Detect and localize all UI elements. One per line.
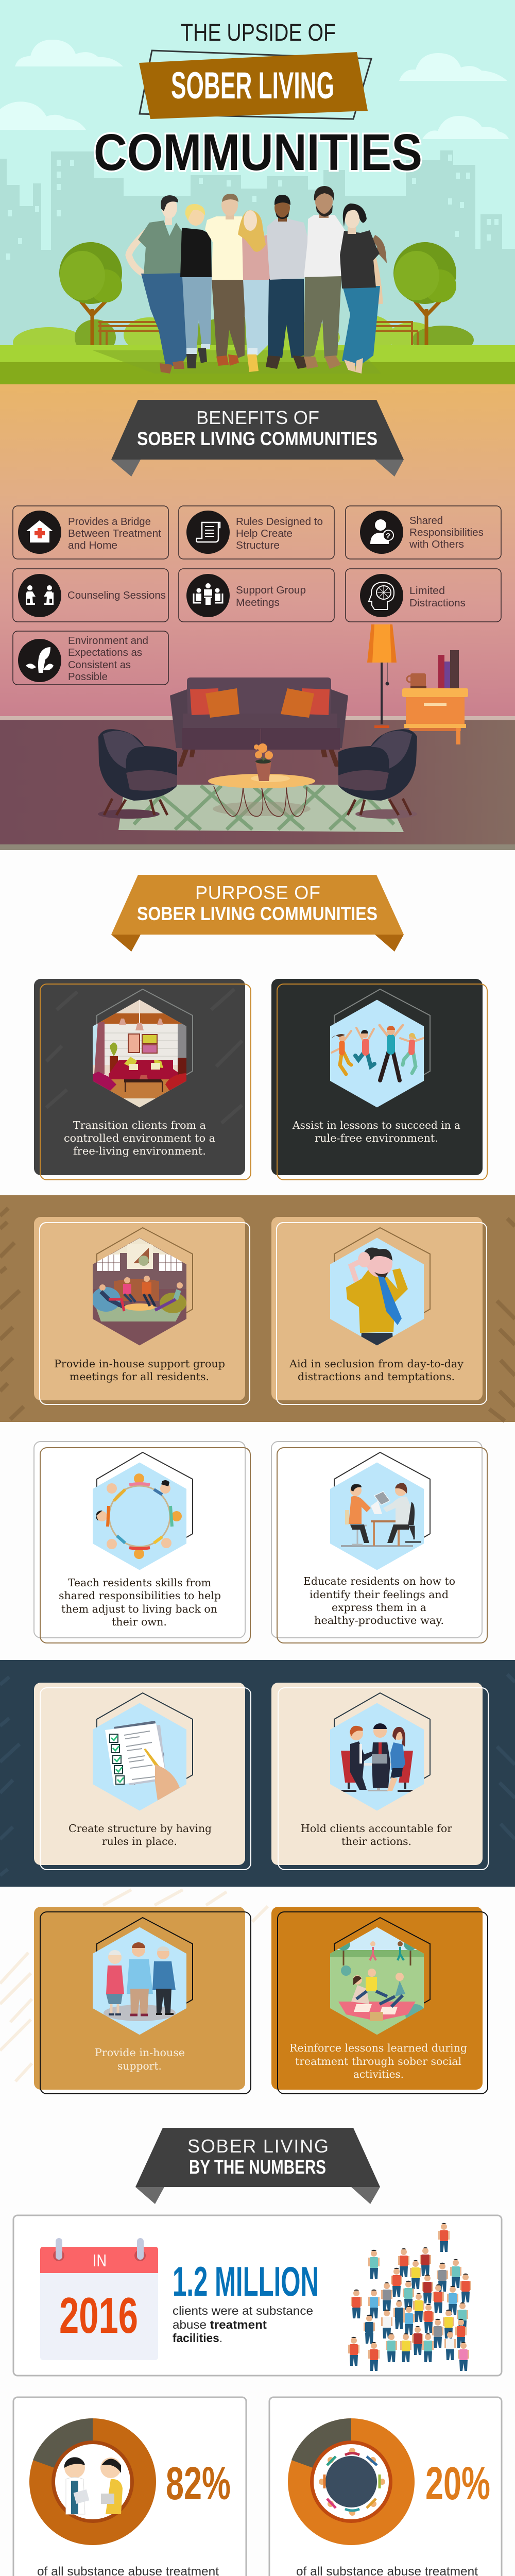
benefit 3 xyxy=(346,506,501,559)
stat: 1.2 MILLION xyxy=(173,2259,319,2305)
benefit 2: Structure xyxy=(236,539,280,551)
text: them adjust to living back on xyxy=(61,1603,217,1615)
text xyxy=(59,1577,221,1628)
text: healthy-productive way. xyxy=(314,1614,444,1626)
icon: calendar: IN xyxy=(93,2251,107,2270)
text: Hold clients accountable for xyxy=(301,1822,452,1835)
benefit 1: Provides a Bridge xyxy=(68,516,151,528)
benefit 7 xyxy=(13,631,168,685)
person 5 grey sweater xyxy=(266,195,309,369)
illustration: stressed man xyxy=(330,1238,424,1346)
text: Provide in-house support group xyxy=(54,1358,225,1370)
illustration: meeting at table xyxy=(330,1703,424,1811)
person 2 black top xyxy=(180,204,212,368)
card: hold accountable xyxy=(271,1683,488,1870)
benefit 5: Meetings xyxy=(236,597,280,608)
clouds xyxy=(0,40,509,139)
person 3 cream shirt xyxy=(205,194,246,366)
donut chart xyxy=(29,2418,156,2545)
benefit 7: Expectations as xyxy=(68,647,142,658)
benefit 2: Help Create xyxy=(236,528,293,539)
card: create structure xyxy=(34,1683,251,1870)
benefit 3: Shared xyxy=(409,515,443,527)
sofa xyxy=(170,677,348,767)
illustration: living room xyxy=(93,999,186,1109)
text xyxy=(95,2046,185,2072)
heading banner: by the numbers: SOBER LIVING xyxy=(187,2136,329,2157)
ground xyxy=(0,345,515,386)
text: identify their feelings and xyxy=(310,1588,449,1601)
text: their own. xyxy=(112,1616,167,1628)
benefit 1 xyxy=(13,506,168,559)
benefit 3: ? xyxy=(386,532,390,540)
text: treatment through sober social xyxy=(295,2055,461,2067)
caption: facilities. xyxy=(173,2331,222,2345)
panel: 1.2 million clients xyxy=(13,2215,502,2376)
text: Teach residents skills from xyxy=(68,1577,211,1589)
text xyxy=(54,1358,225,1383)
illustration: group room xyxy=(92,1238,186,1346)
text: Educate residents on how to xyxy=(303,1575,455,1587)
donut chart xyxy=(288,2418,415,2545)
text xyxy=(303,1575,455,1626)
text xyxy=(289,2042,467,2080)
illustration: circle of people xyxy=(93,1462,186,1570)
illustration: three people xyxy=(93,1927,186,2035)
card: assist in lessons xyxy=(271,979,487,1180)
card: aid in seclusion xyxy=(271,1217,487,1404)
person 6 white shirt xyxy=(304,186,346,369)
title line 1: THE UPSIDE OF xyxy=(181,19,336,46)
heading banner: benefits xyxy=(111,400,404,477)
person 1 green top xyxy=(129,195,187,374)
caption: clients were at substance xyxy=(173,2304,313,2317)
title banner xyxy=(139,50,371,119)
text: activities. xyxy=(353,2068,404,2080)
tree right xyxy=(393,242,456,345)
benches xyxy=(98,321,419,345)
panel: navy band xyxy=(0,1660,515,1887)
rug xyxy=(118,785,404,832)
illustration: two people at table xyxy=(330,1462,424,1570)
card: in-house support xyxy=(34,1907,251,2094)
heading banner: purpose xyxy=(111,875,404,952)
card: teach residents skills xyxy=(34,1442,250,1643)
benefit 6: Limited xyxy=(409,585,445,597)
heading banner: by the numbers: BY THE NUMBERS xyxy=(189,2157,326,2178)
heading banner: benefits: BENEFITS OF xyxy=(196,407,319,428)
percent: 82% xyxy=(166,2458,231,2510)
text: Provide in-house xyxy=(95,2046,185,2059)
text: express them in a xyxy=(332,1601,426,1614)
text: free-living environment. xyxy=(73,1145,206,1157)
caption: abuse treatment xyxy=(173,2318,267,2331)
person 4 pink top xyxy=(238,210,274,372)
text xyxy=(64,1119,215,1157)
text: shared responsibilities to help xyxy=(59,1589,221,1602)
benefit 4: Counseling Sessions xyxy=(67,589,166,601)
crowd of people xyxy=(348,2223,471,2371)
benefit 3: with Others xyxy=(409,538,464,550)
benefit 6 xyxy=(346,569,501,622)
benefit 2 xyxy=(179,506,334,559)
text: rules in place. xyxy=(102,1835,177,1848)
card: support group meetings xyxy=(34,1217,250,1404)
side table with books and cup xyxy=(402,650,468,744)
icon: calendar: 2016 xyxy=(59,2287,138,2344)
text: their actions. xyxy=(341,1835,411,1848)
illustration: jumping people xyxy=(330,999,424,1108)
benefit 3: Responsibilities xyxy=(409,527,484,538)
text: Transition clients from a xyxy=(73,1119,206,1131)
benefit 7: Consistent as xyxy=(68,659,131,671)
text xyxy=(289,1358,464,1383)
benefit 7: Environment and xyxy=(68,635,148,647)
coffee table and vase xyxy=(208,743,315,817)
benefit 5: Support Group xyxy=(236,584,306,596)
city skyline xyxy=(0,150,515,345)
benefit 2: Rules Designed to xyxy=(236,516,323,528)
text xyxy=(292,1119,460,1144)
text: Reinforce lessons learned during xyxy=(289,2042,467,2054)
text: meetings for all residents. xyxy=(70,1370,209,1383)
text: Aid in seclusion from day-to-day xyxy=(289,1358,464,1370)
faint background stripes xyxy=(0,1890,268,2081)
text xyxy=(301,1822,452,1848)
armchair right xyxy=(338,729,417,819)
tree left xyxy=(59,242,122,345)
heading banner: purpose: SOBER LIVING COMMUNITIES xyxy=(137,903,377,924)
panel: brown band xyxy=(0,1195,515,1422)
card: educate residents xyxy=(271,1442,487,1643)
icon: calendar xyxy=(40,2238,158,2360)
illustration: picnic xyxy=(330,1927,426,2038)
armchair left xyxy=(98,729,177,819)
panel: 82 percent outpatient xyxy=(13,2397,246,2576)
text xyxy=(68,1822,212,1848)
benefit 6: Distractions xyxy=(409,597,466,609)
text: Create structure by having xyxy=(68,1822,212,1835)
card: transition clients xyxy=(34,979,251,1180)
panel: benefits room xyxy=(0,386,515,850)
text: Assist in lessons to succeed in a xyxy=(292,1119,460,1131)
benefit 4 xyxy=(13,569,168,622)
bushes xyxy=(13,315,474,358)
person 7 dark top xyxy=(340,204,382,374)
caption xyxy=(173,2304,313,2345)
building windows xyxy=(6,155,499,260)
floor lamp xyxy=(367,624,397,728)
group of seven people xyxy=(129,186,382,374)
text: support. xyxy=(117,2060,162,2072)
text: controlled environment to a xyxy=(64,1132,215,1144)
text: rule-free environment. xyxy=(315,1132,438,1144)
benefit 1: Between Treatment xyxy=(68,528,161,539)
panel: 20 percent residential xyxy=(269,2397,502,2576)
benefit 5 xyxy=(179,569,334,622)
title banner: SOBER LIVING xyxy=(171,65,334,107)
card: reinforce lessons xyxy=(271,1907,488,2094)
hero panel xyxy=(0,0,515,386)
heading banner: purpose: PURPOSE OF xyxy=(195,882,320,903)
title line 3: COMMUNITIES xyxy=(94,124,422,181)
benefit 1: and Home xyxy=(68,539,117,551)
benefit 7: Possible xyxy=(68,671,108,683)
illustration: checklist xyxy=(93,1703,186,1811)
text: distractions and temptations. xyxy=(298,1370,455,1383)
heading banner: benefits: SOBER LIVING COMMUNITIES xyxy=(137,428,377,449)
heading banner: by the numbers xyxy=(135,2128,380,2204)
